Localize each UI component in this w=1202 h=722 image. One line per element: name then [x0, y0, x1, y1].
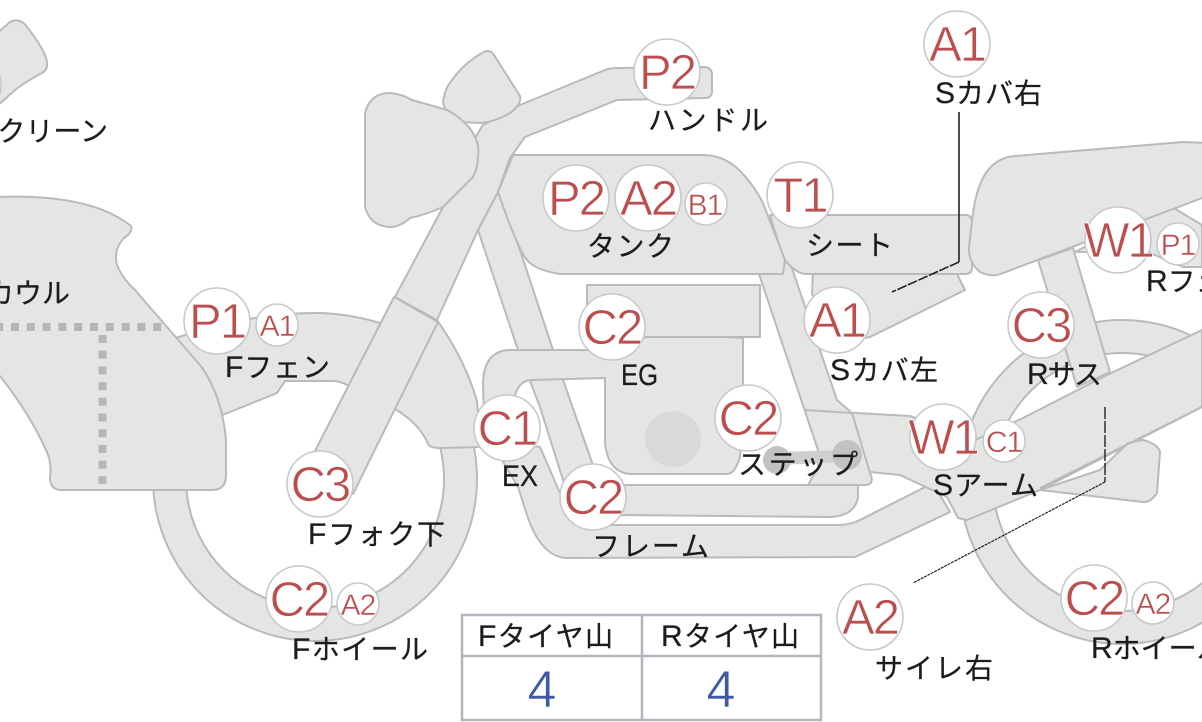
badge: C1 swing arm — [983, 420, 1025, 462]
badge: P1 rear fender: P1 — [1161, 229, 1196, 262]
badge: C2 step: C2 — [719, 392, 777, 446]
badge: A1 side cover left — [804, 287, 870, 353]
badge: A2 silencer: A2 — [842, 591, 898, 645]
front wheel — [153, 317, 477, 641]
leader: silencer right vertical — [1104, 407, 1106, 482]
rear step bracket — [1040, 440, 1160, 502]
badge: A2 silencer — [837, 584, 903, 650]
badge: A1 side cover right — [924, 11, 990, 77]
engine lower block — [605, 330, 743, 474]
badge: T1 seat — [767, 162, 833, 228]
badge: A1 front fender — [256, 304, 298, 346]
meter — [443, 51, 520, 123]
windscreen — [0, 20, 47, 108]
label: tank: タンク — [587, 231, 674, 262]
swing arm edge — [1040, 407, 1202, 488]
badge: C1 exhaust: C1 — [478, 402, 536, 456]
rear fender — [1075, 207, 1202, 267]
label: lower fork: Fフォク下 — [308, 518, 445, 551]
leader: side cover right — [958, 112, 960, 262]
engine upper block — [587, 285, 760, 345]
front fender — [170, 313, 481, 448]
table header: rear tire: Rタイヤ山 — [661, 620, 799, 653]
badge: P2 tank — [543, 165, 609, 231]
table frame — [462, 615, 821, 720]
badge: C2 rear wheel: C2 — [1065, 572, 1123, 626]
label: front wheel: Fホイール — [292, 633, 428, 666]
step plate top edge — [805, 410, 852, 413]
cowl — [0, 197, 226, 490]
badge: C1 swing arm: C1 — [986, 426, 1022, 459]
badge: A1 side cover left: A1 — [809, 294, 865, 348]
swing arm — [805, 330, 1202, 520]
table value: front tire: 4 — [528, 661, 556, 719]
label: handle: ハンドル — [648, 105, 768, 136]
tire tread table — [462, 615, 821, 720]
label: swing arm: Sアーム — [933, 469, 1038, 502]
headlight — [365, 93, 478, 227]
badge: T1 seat: T1 — [773, 169, 827, 223]
badge: P2 tank: P2 — [548, 172, 604, 226]
label: exhaust: EX — [502, 460, 538, 493]
crankcase circle — [645, 411, 701, 467]
fuel tank — [498, 155, 785, 274]
label: silencer right: サイレ右 — [875, 653, 993, 684]
label: rear shock: Rサス — [1027, 358, 1102, 391]
badge: A2 front wheel — [337, 583, 379, 625]
label: front fender: Fフェン — [225, 351, 330, 384]
rear frame and step plate — [755, 248, 872, 485]
cowl dotted seam — [0, 323, 165, 331]
frame downtube — [478, 192, 593, 480]
handlebar and fork top — [395, 67, 712, 320]
badge: A1 side cover right: A1 — [929, 18, 985, 72]
label: step: ステップ — [738, 449, 858, 480]
rear shock — [1038, 248, 1110, 387]
badge: A2 rear wheel: A2 — [1136, 588, 1171, 621]
badge: A2 rear wheel — [1132, 582, 1174, 624]
badge: A1 front fender: A1 — [260, 310, 295, 343]
badge: P2 handle — [634, 39, 700, 105]
badge: P2 handle: P2 — [639, 46, 695, 100]
leader: side cover right diagonal — [892, 262, 959, 292]
badge: C3 rear shock: C3 — [1012, 299, 1071, 353]
badge: C2 front wheel: C2 — [270, 573, 328, 627]
table header: front tire: Fタイヤ山 — [478, 620, 613, 653]
badge: C2 engine: C2 — [583, 301, 641, 355]
tail cowl — [969, 142, 1202, 275]
step bar — [777, 450, 847, 465]
badge: P1 front fender — [184, 288, 250, 354]
label: engine: EG — [621, 359, 658, 392]
rear wheel — [960, 320, 1202, 644]
exhaust pipe — [483, 350, 612, 420]
badge: A2 tank — [615, 165, 681, 231]
seat — [770, 215, 972, 274]
label: side cover left: Sカバ左 — [830, 354, 938, 387]
badge: A2 tank: A2 — [620, 172, 676, 226]
label: side cover right: Sカバ右 — [935, 77, 1042, 110]
badge: P1 front fender: P1 — [189, 295, 245, 349]
lower frame tube — [490, 440, 950, 558]
badge: C2 frame: C2 — [564, 471, 622, 525]
badge: W1 rear fender: W1 — [1083, 214, 1153, 268]
middle frame tube — [563, 465, 858, 520]
badge: W1 swing arm: W1 — [908, 411, 978, 465]
step peg left — [763, 446, 791, 474]
badge: C3 fork: C3 — [291, 458, 350, 512]
label: seat: シート — [806, 230, 893, 261]
leader: silencer right diagonal — [913, 482, 1105, 583]
side cover — [812, 270, 965, 345]
step peg right — [832, 440, 862, 470]
fork lower tube — [315, 297, 438, 494]
label: frame: フレーム — [592, 531, 709, 562]
badge: windscreen (cropped) — [0, 52, 1, 118]
badge: P1 rear fender — [1157, 223, 1199, 265]
leader lines — [892, 112, 1105, 583]
badge: B1 tank: B1 — [688, 189, 723, 222]
badge: A2 front wheel: A2 — [341, 589, 376, 622]
table value: rear tire: 4 — [707, 661, 735, 719]
badge: B1 tank — [685, 183, 727, 225]
